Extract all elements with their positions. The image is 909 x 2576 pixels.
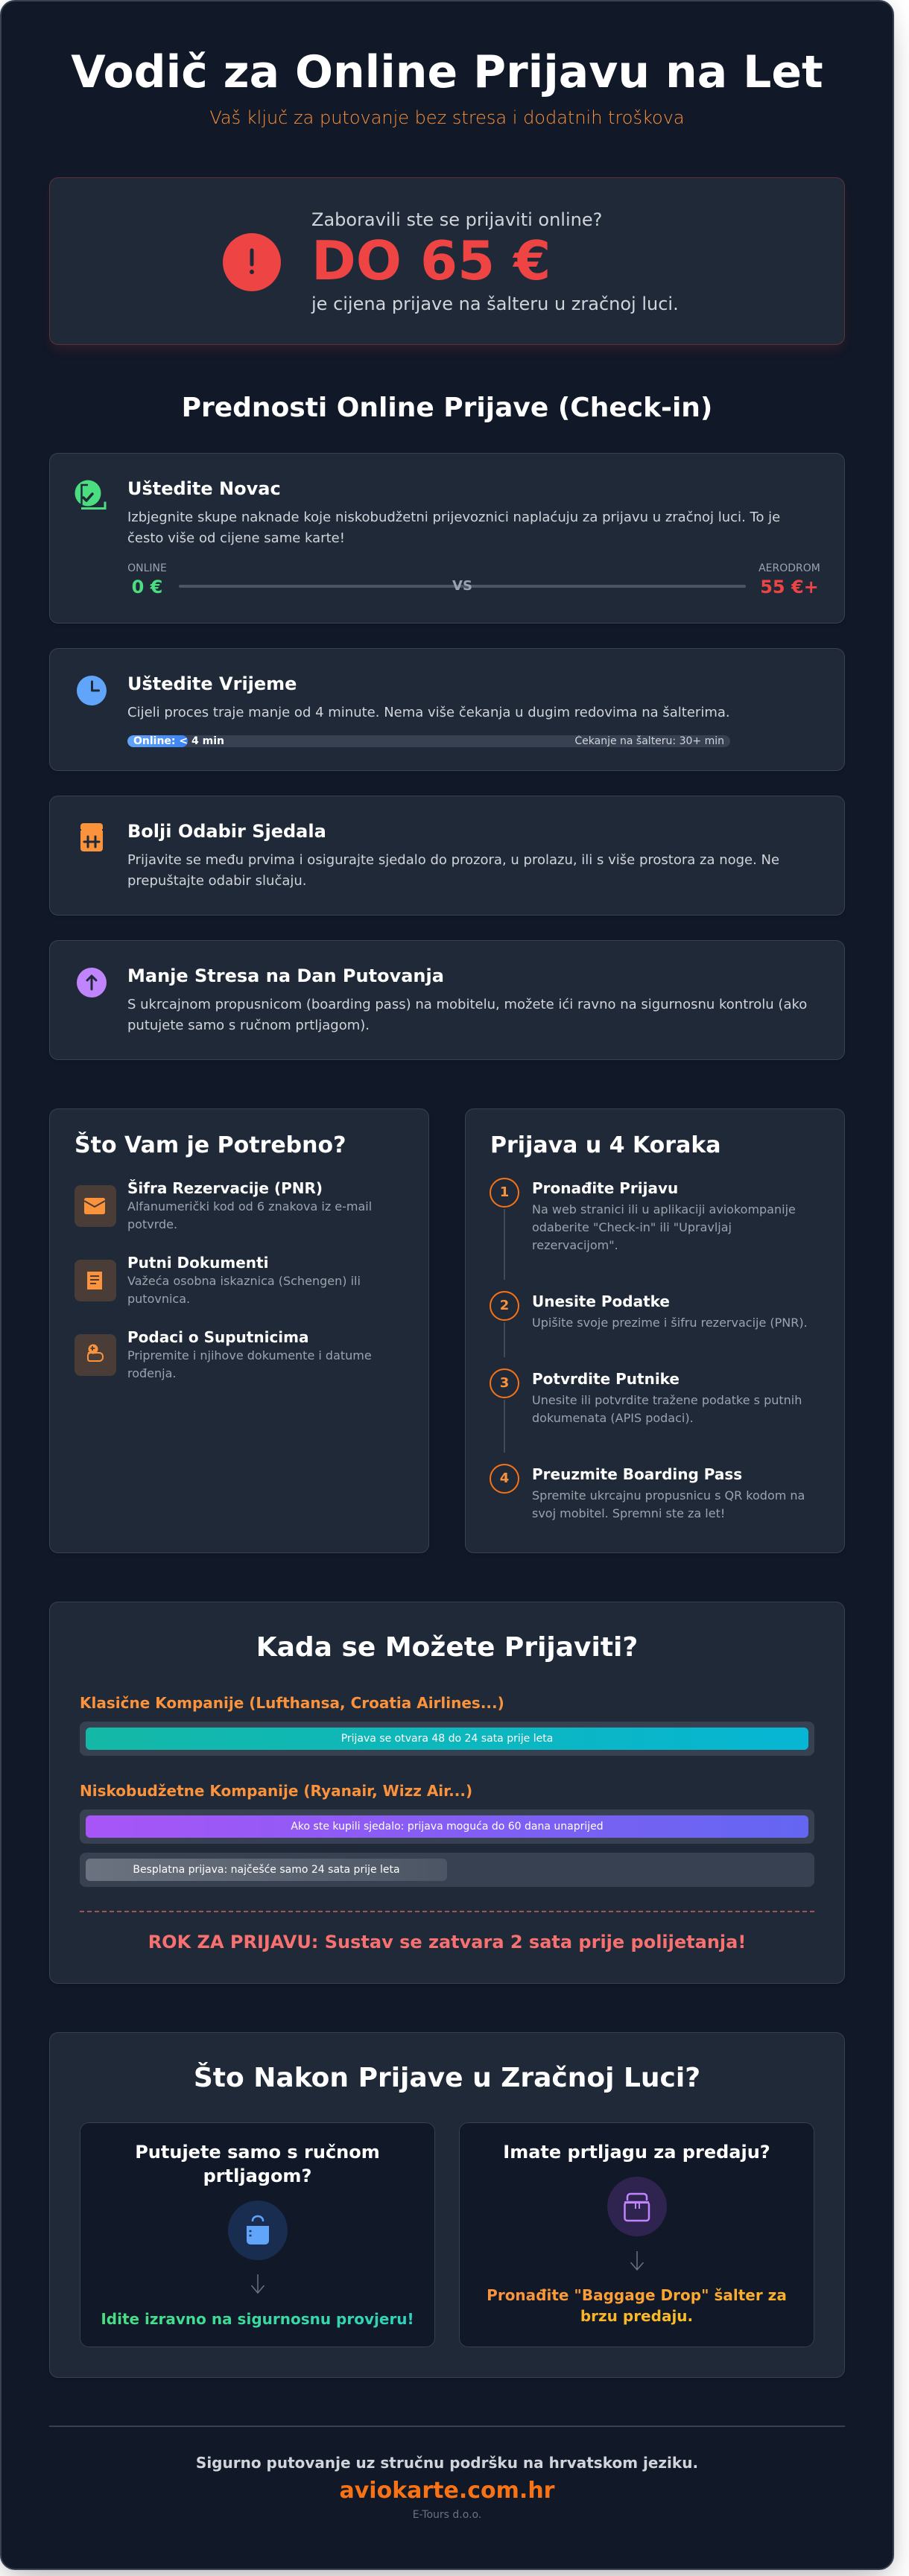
- free check-in bar: [80, 1853, 814, 1887]
- item title: Šifra Rezervacije (PNR): [127, 1179, 323, 1197]
- footer brand: aviokarte.com.hr: [340, 2478, 554, 2504]
- panel: at the airport: [49, 2032, 845, 2378]
- counter label: Čekanje na šalteru: 30+ min: [574, 735, 724, 747]
- bar fill: Prijava se otvara 48 do 24 sata prije leta: [341, 1733, 553, 1745]
- panel: seats: [49, 796, 845, 916]
- icon: hand bag: [228, 2201, 288, 2260]
- paid seat bar: [80, 1809, 814, 1844]
- icon: person add: [75, 1334, 116, 1376]
- panel: requirements: [49, 1108, 429, 1553]
- bar fill: [86, 1815, 808, 1838]
- item description: Pripremite i njihove dokumente i datume: [127, 1348, 372, 1362]
- item: PNR: [75, 1179, 372, 1231]
- panel: when to check in: [49, 1602, 845, 1984]
- option: carry-on only: [80, 2122, 435, 2347]
- card description: prepuštajte odabir slučaju.: [127, 873, 307, 889]
- footer: [49, 2426, 845, 2522]
- step 3: [490, 1368, 802, 1453]
- connector: [504, 1400, 505, 1453]
- footer company: E-Tours d.o.o.: [413, 2509, 481, 2521]
- item description: [127, 1199, 372, 1231]
- card description: Cijeli proces traje manje od 4 minute. Nema više čekanja u dugim redovima na šalterima.: [127, 705, 730, 720]
- item description: rođenja.: [127, 1366, 176, 1380]
- airport price: AERODROM: [758, 562, 820, 574]
- step description: svoj mobitel. Spremni ste za let!: [532, 1506, 725, 1520]
- step description: rezervacijom".: [532, 1238, 618, 1252]
- bar fill: Besplatna prijava: najčešće samo 24 sata prije leta: [133, 1864, 400, 1876]
- step description: odaberite "Check-in" ili "Upravljaj: [532, 1220, 732, 1234]
- heading: benefits: Prednosti Online Prijave (Check-in): [182, 393, 712, 423]
- step number: 2: [500, 1298, 509, 1313]
- card title: Uštedite Novac: [127, 478, 281, 499]
- option title: Putujete samo s ručnom: [135, 2142, 380, 2163]
- step number: 3: [500, 1375, 509, 1391]
- step 1: [490, 1178, 796, 1280]
- card description: često više od cijene same karte!: [127, 530, 345, 546]
- icon: seat: [80, 823, 103, 851]
- step description: [532, 1488, 805, 1520]
- card title: Manje Stresa na Dan Putovanja: [127, 965, 444, 986]
- step number: 1: [500, 1184, 509, 1200]
- heading: Prijava u 4 Koraka: [490, 1132, 721, 1158]
- step number: [490, 1291, 519, 1321]
- step description: Upišite svoje prezime i šifru rezervacije (PNR).: [532, 1316, 808, 1330]
- item: passengers: [75, 1328, 372, 1380]
- connector: [504, 1322, 505, 1357]
- panel: fee alert: [49, 177, 845, 345]
- step number: [490, 1368, 519, 1398]
- time bar: [127, 735, 730, 747]
- item description: potvrde.: [127, 1217, 177, 1231]
- online segment: [127, 735, 188, 747]
- step description: [532, 1393, 802, 1425]
- alert amount: DO 65 €: [311, 229, 551, 292]
- item description: Alfanumerički kod od 6 znakova iz e-mail: [127, 1199, 372, 1214]
- step 2: [490, 1291, 808, 1357]
- subtitle: Vaš ključ za putovanje bez stresa i dodatnih troškova: [209, 107, 685, 128]
- icon: phone check: [75, 480, 106, 510]
- icon: clock: [77, 676, 107, 705]
- airport price: 55 €+: [760, 577, 819, 597]
- dashed separator: [80, 1911, 814, 1912]
- card description: S ukrcajnom propusnicom (boarding pass) na mobitelu, možete ići ravno na sigurnosnu kontrolu (ako: [127, 997, 807, 1012]
- deadline: ROK ZA PRIJAVU: Sustav se zatvara 2 sata prije polijetanja!: [148, 1932, 746, 1952]
- card description: [127, 997, 807, 1033]
- panel: save time: [49, 648, 845, 771]
- card title: Bolji Odabir Sjedala: [127, 821, 326, 842]
- footer tagline: Sigurno putovanje uz stručnu podršku na hrvatskom jeziku.: [196, 2454, 698, 2472]
- bar fill: Ako ste kupili sjedalo: prijava moguća do 60 dana unaprijed: [291, 1821, 604, 1833]
- connector: [504, 1209, 505, 1280]
- option action: brzu predaju.: [580, 2307, 693, 2325]
- step number: 4: [500, 1471, 509, 1486]
- card description: [127, 510, 780, 546]
- card description: Izbjegnite skupe naknade koje niskobudžetni prijevoznici naplaćuju za prijavu u zračnoj luci. To je: [127, 510, 780, 525]
- title: Vodič za Online Prijavu na Let: [71, 46, 823, 98]
- classic airlines label: Klasične Kompanije (Lufthansa, Croatia Airlines...): [80, 1694, 504, 1712]
- step description: Spremite ukrcajnu propusnicu s QR kodom na: [532, 1488, 805, 1503]
- item description: [127, 1348, 372, 1380]
- step title: Pronađite Prijavu: [532, 1179, 678, 1197]
- icon: suitcase: [607, 2177, 667, 2236]
- option title: prtljagom?: [203, 2166, 311, 2186]
- bar fill: [86, 1859, 447, 1881]
- step number: [490, 1178, 519, 1208]
- item title: Podaci o Suputnicima: [127, 1328, 308, 1346]
- step title: Preuzmite Boarding Pass: [532, 1465, 742, 1483]
- option title: [135, 2142, 380, 2186]
- card description: putujete samo s ručnom prtljagom).: [127, 1018, 370, 1033]
- versus bar: VS: [452, 578, 472, 594]
- item title: Putni Dokumenti: [127, 1254, 268, 1272]
- option title: Imate prtljagu za predaju?: [503, 2142, 770, 2163]
- card title: Uštedite Vrijeme: [127, 673, 297, 694]
- icon: up arrow: [77, 968, 107, 997]
- card description: Prijavite se među prvima i osigurajte sjedalo do prozora, u prolazu, ili s više prostora za noge. Ne: [127, 852, 779, 868]
- arrow: down: [251, 2274, 265, 2294]
- arrow: down: [630, 2251, 644, 2271]
- online price: [127, 562, 167, 597]
- step title: Unesite Podatke: [532, 1292, 670, 1310]
- step number: [490, 1464, 519, 1494]
- airport price: [758, 562, 820, 597]
- card description: [127, 852, 779, 889]
- icon: envelope: [75, 1185, 116, 1227]
- item description: Važeća osobna iskaznica (Schengen) ili: [127, 1274, 361, 1288]
- step description: Unesite ili potvrdite tražene podatke s putnih: [532, 1393, 802, 1407]
- bar fill: [86, 1728, 808, 1750]
- step description: Na web stranici ili u aplikaciji aviokompanije: [532, 1202, 796, 1216]
- heading: Kada se Možete Prijaviti?: [256, 1632, 638, 1663]
- option action: [487, 2286, 787, 2325]
- panel: less stress: [49, 940, 845, 1060]
- alert trailing text: je cijena prijave na šalteru u zračnoj luci.: [311, 294, 679, 314]
- classic airlines bar: [80, 1722, 814, 1756]
- online price: ONLINE: [127, 562, 167, 574]
- option action: Idite izravno na sigurnosnu provjeru!: [101, 2310, 414, 2328]
- step 4: [490, 1464, 805, 1520]
- panel: save money: [49, 453, 845, 624]
- panel: four steps: [465, 1108, 845, 1553]
- online price: 0 €: [132, 577, 162, 597]
- versus bar: [179, 585, 746, 588]
- step description: dokumenata (APIS podaci).: [532, 1411, 694, 1425]
- step title: Potvrdite Putnike: [532, 1370, 680, 1388]
- alert lead text: Zaboravili ste se prijaviti online?: [311, 209, 602, 230]
- item description: [127, 1274, 361, 1306]
- option action: Pronađite "Baggage Drop" šalter za: [487, 2286, 787, 2304]
- heading: Što Vam je Potrebno?: [75, 1132, 346, 1158]
- item description: putovnica.: [127, 1292, 190, 1306]
- low-cost airlines label: Niskobudžetne Kompanije (Ryanair, Wizz Air...): [80, 1782, 472, 1800]
- option: checked baggage: [459, 2122, 814, 2347]
- icon: document: [75, 1260, 116, 1301]
- online label: Online: < 4 min: [133, 735, 224, 747]
- heading: Što Nakon Prijave u Zračnoj Luci?: [194, 2063, 700, 2093]
- icon: warning: [223, 233, 281, 291]
- item: documents: [75, 1254, 361, 1306]
- step description: [532, 1202, 796, 1252]
